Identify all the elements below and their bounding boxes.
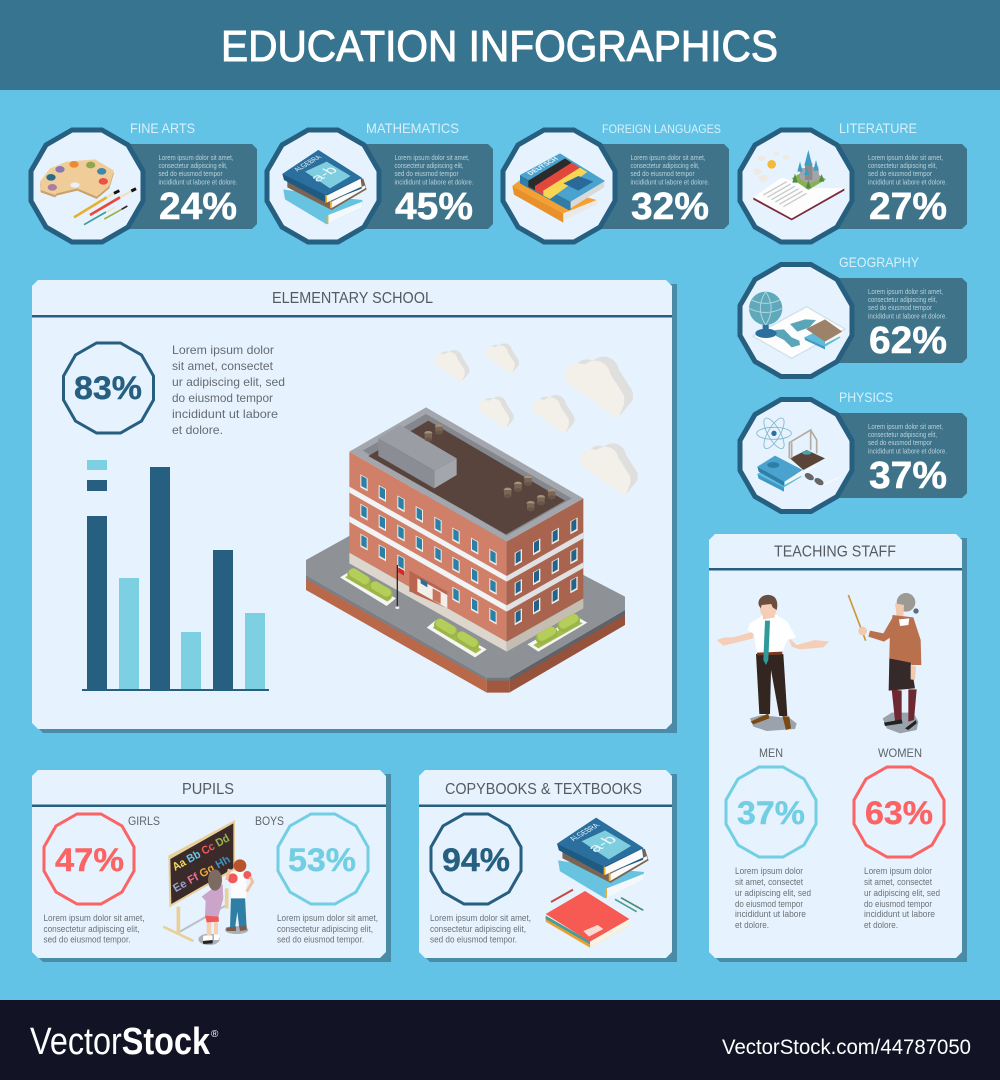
- clouds: [434, 343, 638, 496]
- men text: [735, 866, 811, 930]
- footer url: VectorStock.com/44787050: [722, 1036, 971, 1059]
- tile: foreign languages: [503, 122, 729, 242]
- panel: copybooks and textbooks: [419, 770, 677, 962]
- stat: 83%: [64, 343, 154, 433]
- boys text: sed do eiusmod tempor.: [277, 934, 364, 944]
- girls text: consectetur adipiscing elit,: [44, 924, 140, 934]
- elementary school text: sit amet, consectet: [172, 359, 274, 373]
- literature text: consectetur adipiscing elit,: [868, 161, 937, 170]
- women text: et dolore.: [864, 920, 898, 930]
- geography percent: 62%: [869, 320, 947, 362]
- illustration: notebooks and pencils: [546, 890, 643, 948]
- geography text: consectetur adipiscing elit,: [868, 295, 937, 304]
- literature text: [868, 153, 947, 186]
- geography text: sed do eiusmod tempor: [868, 303, 932, 312]
- panel: elementary school: [32, 280, 677, 733]
- boys label: BOYS: [255, 814, 284, 828]
- illustration: textbooks: a-b: [584, 833, 621, 855]
- literature text: Lorem ipsum dolor sit amet,: [868, 153, 943, 162]
- foreign languages percent: 32%: [631, 186, 709, 228]
- elementary school text: ur adipiscing elit, sed: [172, 375, 285, 389]
- stat: boys 53%: 53%: [288, 842, 356, 878]
- foreign languages text: consectetur adipiscing elit,: [630, 161, 700, 170]
- men text: do eiusmod tempor: [735, 899, 803, 909]
- fine arts heading: FINE ARTS: [130, 120, 195, 136]
- boys text: Lorem ipsum dolor sit amet,: [277, 913, 378, 923]
- icon: algebra books: ALGEBRA: [292, 154, 324, 173]
- copybooks text: [430, 913, 531, 944]
- fine arts text: Lorem ipsum dolor sit amet,: [158, 153, 234, 162]
- men text: incididunt ut labore: [735, 909, 806, 919]
- elementary school text: do eiusmod tempor: [172, 391, 273, 405]
- illustration: male teacher: [717, 595, 829, 731]
- tile: geography: [740, 254, 967, 376]
- mathematics text: [394, 153, 474, 186]
- girls text: Lorem ipsum dolor sit amet,: [44, 913, 144, 923]
- fine arts percent: 24%: [159, 186, 237, 228]
- foreign languages text: Lorem ipsum dolor sit amet,: [630, 153, 706, 162]
- literature heading: LITERATURE: [839, 120, 917, 136]
- elementary school text: [172, 343, 285, 437]
- stat: girls 47%: 47%: [55, 842, 124, 878]
- illustration: children at chalkboard: [163, 820, 253, 945]
- icon: algebra books: [282, 150, 367, 224]
- geography text: incididunt ut labore et dolore.: [868, 312, 947, 320]
- icon: paint palette and brushes: [40, 159, 136, 225]
- stat: men 37%: 37%: [737, 795, 805, 831]
- fine arts text: consectetur adipiscing elit,: [158, 161, 228, 170]
- panel: pupils: [32, 770, 391, 962]
- bar chart: [82, 460, 269, 691]
- fine arts text: sed do eiusmod tempor: [158, 169, 223, 178]
- fine arts text: [158, 153, 238, 186]
- tile: mathematics: [267, 120, 493, 242]
- fine arts text: incididunt ut labore et dolore.: [158, 178, 238, 186]
- women text: sit amet, consectet: [864, 877, 932, 887]
- foreign languages text: incididunt ut labore et dolore.: [630, 178, 710, 186]
- men text: Lorem ipsum dolor: [735, 866, 803, 876]
- girls label: GIRLS: [128, 814, 160, 828]
- copybooks text: Lorem ipsum dolor sit amet,: [430, 913, 531, 923]
- teaching staff heading: TEACHING STAFF: [774, 544, 896, 560]
- mathematics text: Lorem ipsum dolor sit amet,: [394, 153, 470, 162]
- men label: MEN: [759, 746, 783, 760]
- physics text: Lorem ipsum dolor sit amet,: [868, 422, 943, 431]
- tile: fine arts: [31, 120, 257, 242]
- women text: Lorem ipsum dolor: [864, 866, 932, 876]
- panel: teaching staff: [709, 534, 967, 962]
- icon: german books: DEUTSCH: [526, 156, 560, 176]
- stat: 83%: 83%: [74, 370, 142, 406]
- stat: girls 47%: [44, 814, 134, 904]
- stat: men 37%: [726, 767, 816, 857]
- elementary school heading: ELEMENTARY SCHOOL: [272, 290, 433, 307]
- men text: sit amet, consectet: [735, 877, 803, 887]
- pupils heading: PUPILS: [182, 781, 234, 798]
- mathematics text: consectetur adipiscing elit,: [394, 161, 464, 170]
- icon: open book with castle: [753, 150, 844, 220]
- literature percent: 27%: [869, 186, 947, 228]
- girls text: [44, 913, 144, 944]
- illustration: children at chalkboard: Aa Bb Cc Dd: [171, 832, 232, 874]
- copybooks text: sed do eiusmod tempor.: [430, 934, 517, 944]
- stat: women 63%: [854, 767, 944, 857]
- physics percent: 37%: [869, 455, 947, 497]
- elementary school text: incididunt ut labore: [172, 407, 278, 421]
- physics text: [868, 422, 947, 456]
- elementary school text: Lorem ipsum dolor: [172, 343, 274, 357]
- stat: women 63%: 63%: [865, 795, 933, 831]
- copybooks heading: COPYBOOKS & TEXTBOOKS: [445, 781, 642, 798]
- boys text: consectetur adipiscing elit,: [277, 924, 373, 934]
- physics text: incididunt ut labore et dolore.: [868, 446, 947, 456]
- illustration: textbooks: [557, 818, 649, 898]
- foreign languages text: [630, 153, 710, 186]
- physics heading: PHYSICS: [839, 389, 893, 405]
- footer logo: VectorStock: [30, 1021, 211, 1063]
- illustration: school building: [306, 407, 625, 693]
- girls text: sed do eiusmod tempor.: [44, 934, 130, 944]
- footer bar: [0, 1000, 1000, 1080]
- registered mark: ®: [211, 1029, 219, 1040]
- mathematics heading: MATHEMATICS: [366, 120, 459, 136]
- literature text: incididunt ut labore et dolore.: [868, 178, 947, 186]
- stat: 94%: [431, 814, 521, 904]
- geography heading: GEOGRAPHY: [839, 254, 920, 270]
- women label: WOMEN: [878, 746, 922, 760]
- illustration: textbooks: ALGEBRA: [567, 822, 602, 842]
- women text: do eiusmod tempor: [864, 899, 932, 909]
- foreign languages heading: FOREIGN LANGUAGES: [602, 122, 721, 136]
- icon: german books: [512, 153, 605, 223]
- men text: et dolore.: [735, 920, 769, 930]
- mathematics percent: 45%: [395, 186, 473, 228]
- stat: boys 53%: [278, 814, 368, 904]
- women text: ur adipiscing elit, sed: [864, 888, 940, 898]
- icon: atom, cradle, books and glasses: [757, 415, 840, 492]
- title: EDUCATION INFOGRAPHICS: [221, 22, 778, 71]
- physics text: sed do eiusmod tempor: [868, 438, 932, 447]
- illustration: children at chalkboard: Ee Ff Gg Hh: [171, 854, 233, 895]
- mathematics text: incididunt ut labore et dolore.: [394, 178, 474, 186]
- icon: globe and map: [749, 292, 845, 358]
- geography text: Lorem ipsum dolor sit amet,: [868, 287, 943, 296]
- men text: ur adipiscing elit, sed: [735, 888, 811, 898]
- icon: algebra books: a-b: [307, 164, 342, 184]
- mathematics text: sed do eiusmod tempor: [394, 169, 459, 178]
- stat: 94%: 94%: [442, 842, 510, 878]
- women text: [864, 866, 940, 930]
- tile: physics: [740, 389, 967, 512]
- tile: literature: [740, 120, 967, 242]
- copybooks text: consectetur adipiscing elit,: [430, 924, 526, 934]
- boys text: [277, 913, 378, 944]
- elementary school text: et dolore.: [172, 423, 223, 437]
- header banner: [0, 0, 1000, 90]
- foreign languages text: sed do eiusmod tempor: [630, 169, 695, 178]
- geography text: [868, 287, 947, 320]
- illustration: female teacher: [848, 593, 921, 733]
- literature text: sed do eiusmod tempor: [868, 169, 932, 178]
- women text: incididunt ut labore: [864, 909, 935, 919]
- physics text: consectetur adipiscing elit,: [868, 430, 937, 439]
